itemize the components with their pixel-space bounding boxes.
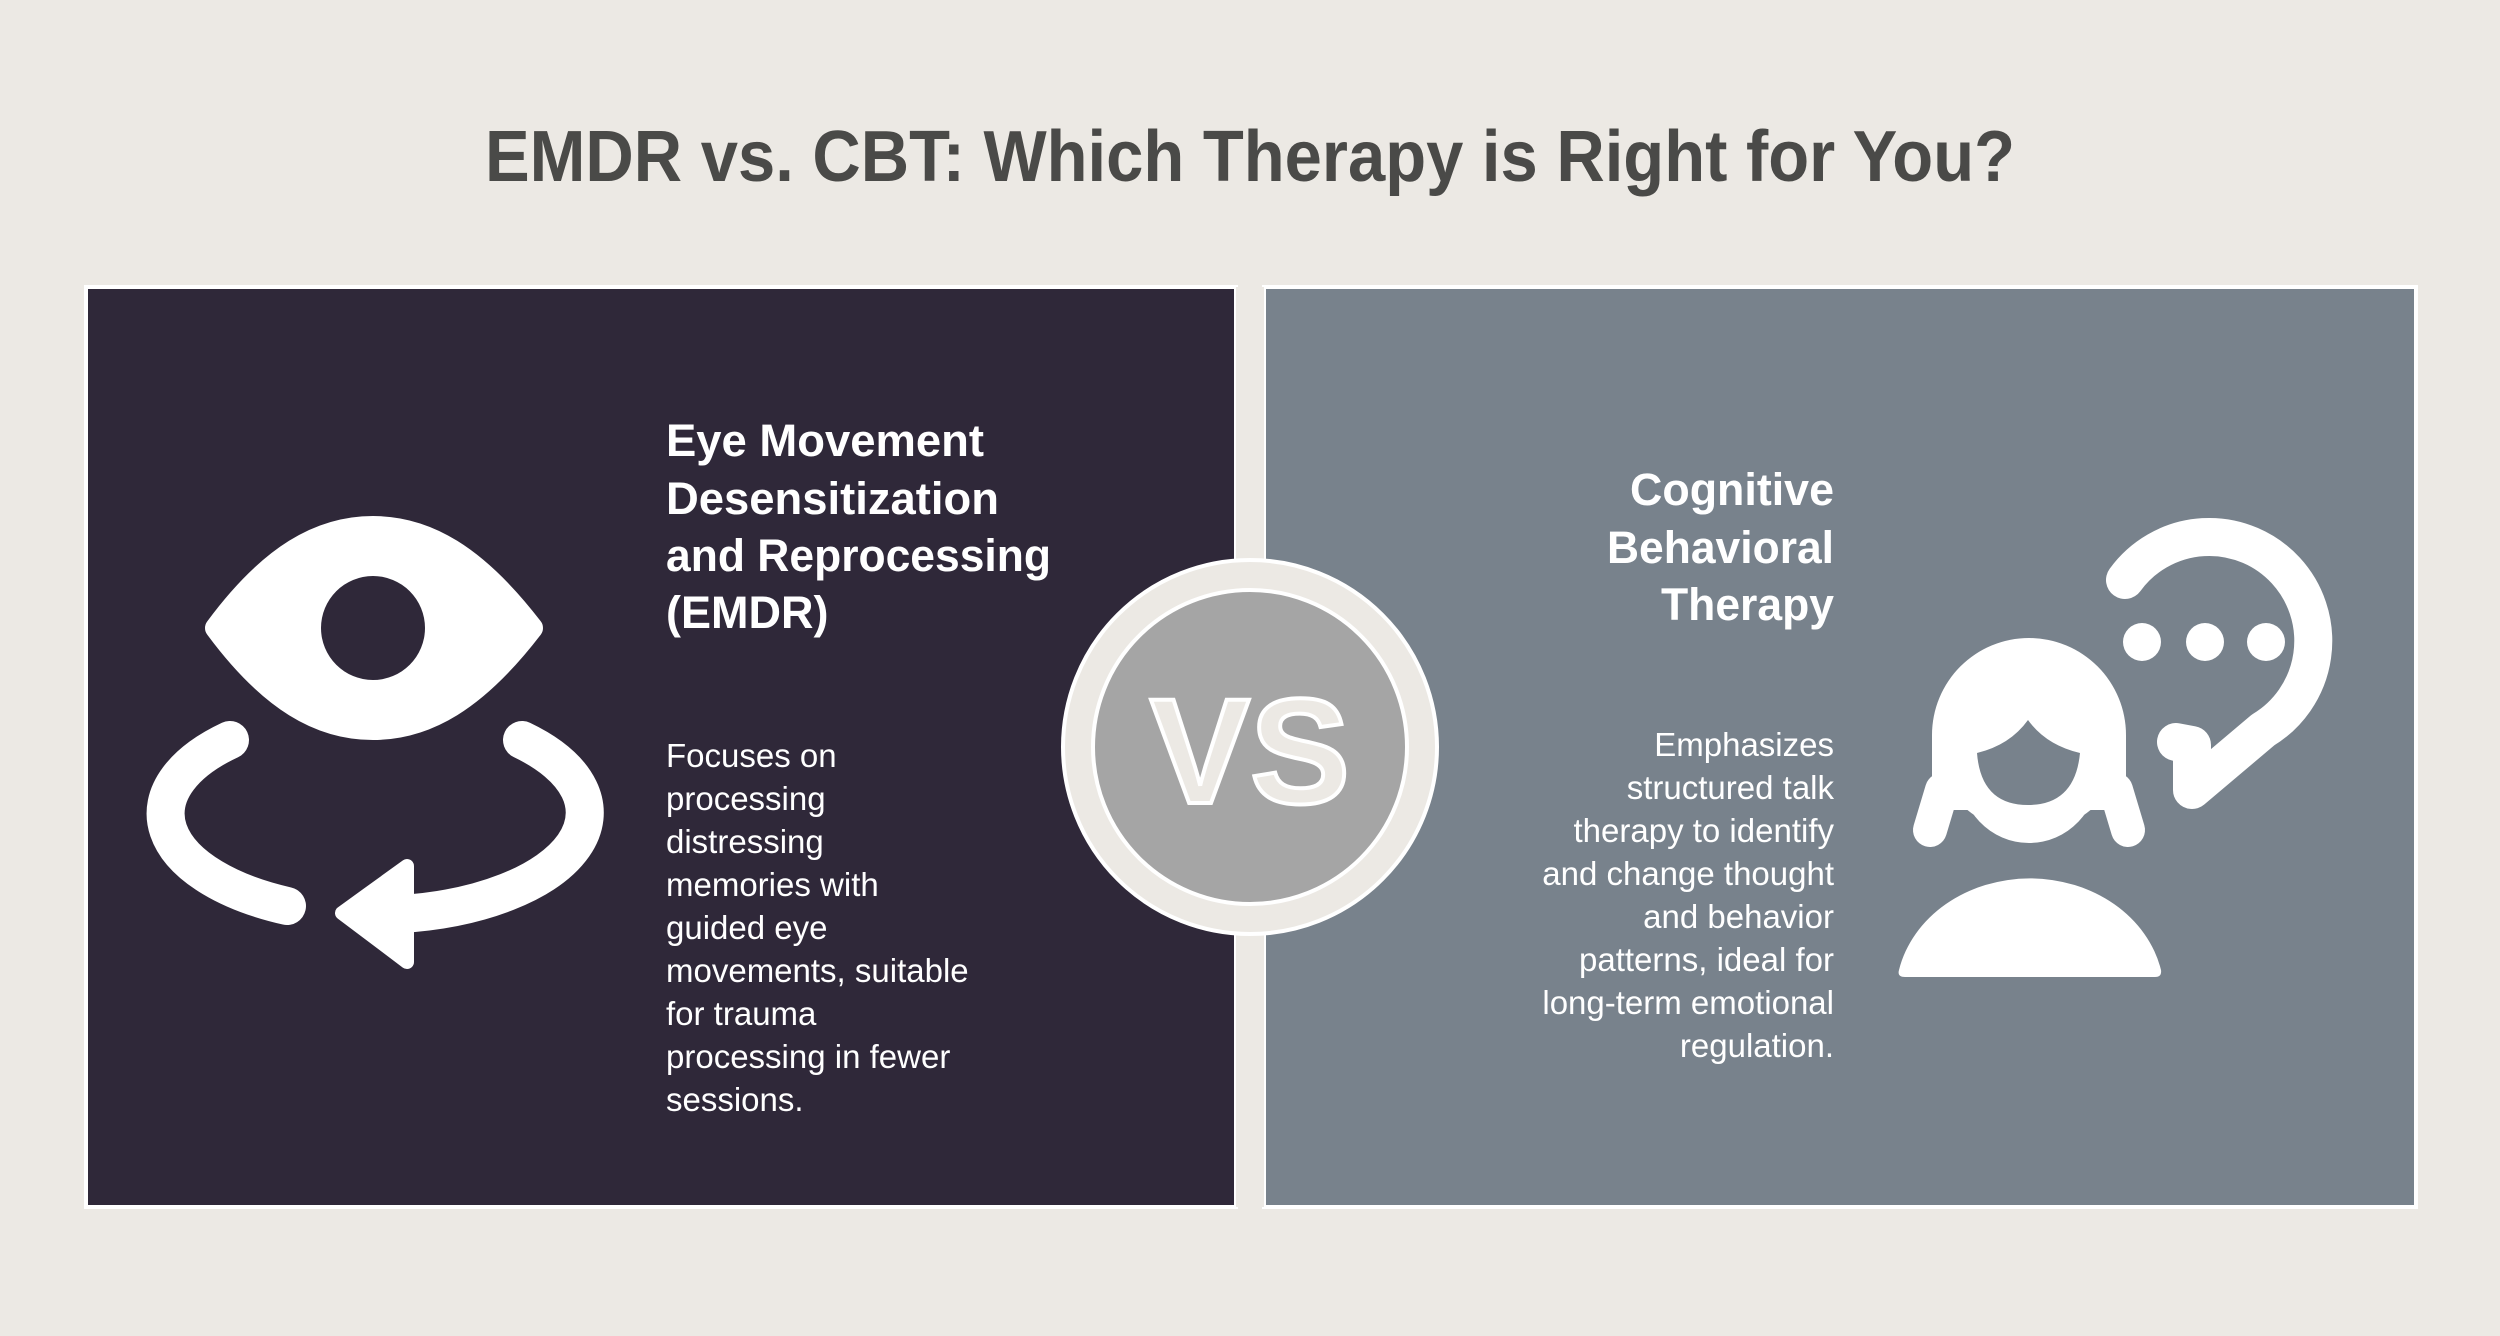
text: CBT description: regulation. [1680,1027,1834,1064]
icon: eye with rotation arrow [166,527,585,962]
heading: CBT: Behavioral [1607,522,1834,573]
panel: CBT [1264,287,2416,1207]
text: EMDR description: sessions. [666,1081,804,1118]
text: EMDR description: processing in fewer [666,1038,950,1075]
text: CBT description: patterns, ideal for [1579,941,1834,978]
heading: CBT: Therapy [1661,579,1834,630]
heading: EMDR: (EMDR) [666,587,828,638]
text: CBT description: structured talk [1627,769,1834,806]
text: CBT description: therapy to identify [1574,812,1834,849]
icon: person with speech bubble [1899,537,2313,977]
heading: EMDR: Desensitization [666,473,999,524]
text: EMDR description: memories with [666,866,879,903]
VS badge [1063,287,1437,1207]
text: EMDR description: distressing [666,823,824,860]
text: EMDR description: for trauma [666,995,817,1032]
panel: EMDR [86,287,1236,1207]
text: CBT description: and change thought [1542,855,1834,892]
VS badge: VS [1150,667,1350,835]
heading: EMDR: and Reprocessing [666,530,1051,581]
text: CBT description: Emphasizes [1654,726,1834,763]
text: EMDR description: guided eye [666,909,827,946]
heading: CBT [1607,464,1834,630]
text: EMDR description: processing [666,780,826,817]
heading: CBT: Cognitive [1630,464,1834,515]
text: CBT description [1542,726,1834,1064]
text: EMDR description: Focuses on [666,737,837,774]
text: EMDR description [666,737,969,1118]
text: CBT description: and behavior [1643,898,1834,935]
title: EMDR vs. CBT: Which Therapy is Right for You? [485,117,2015,197]
text: EMDR description: movements, suitable [666,952,969,989]
heading: EMDR [666,415,1051,638]
heading: EMDR: Eye Movement [666,415,984,466]
text: CBT description: long-term emotional [1542,984,1834,1021]
